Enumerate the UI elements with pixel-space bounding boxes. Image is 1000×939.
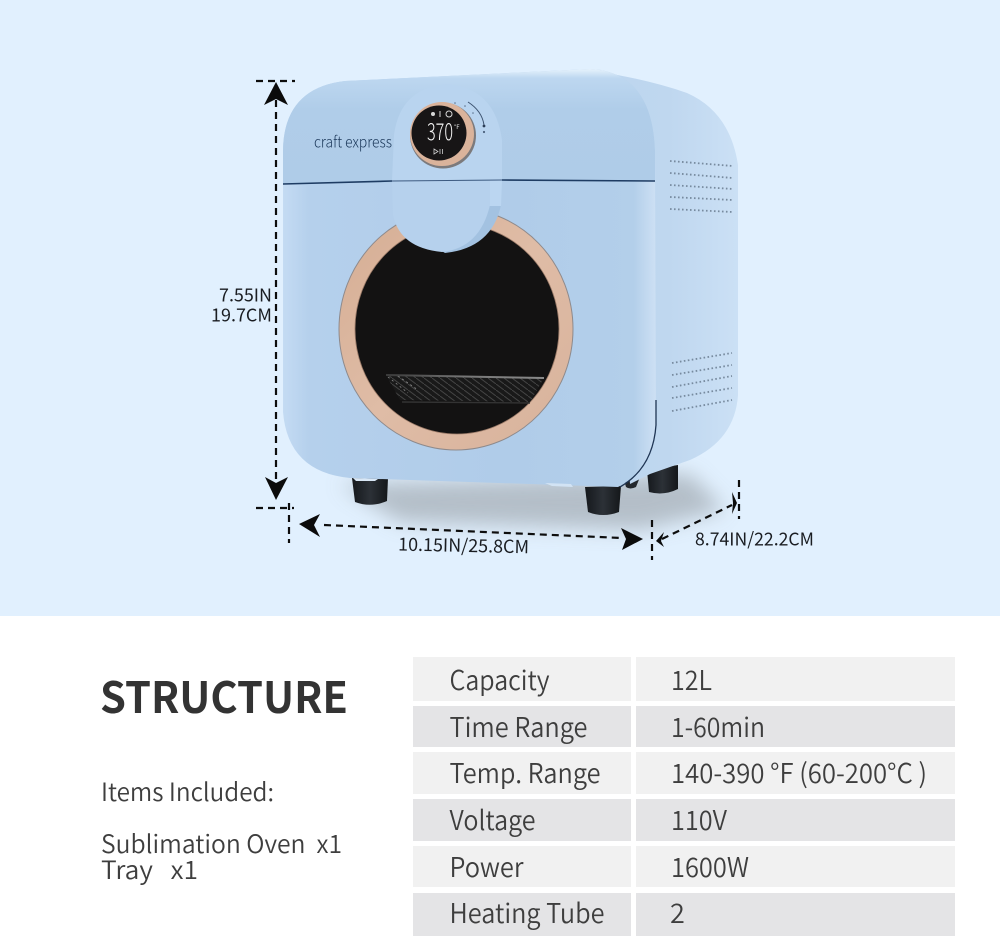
tray in window (386, 375, 544, 403)
floor shadow under oven (340, 474, 725, 530)
front and side seam (620, 400, 656, 487)
logo text: craft express (314, 130, 392, 152)
play pause icon (434, 149, 442, 154)
items included text block: Tray x1 (101, 851, 198, 887)
mode icons (431, 112, 435, 116)
control panel flap front (392, 181, 490, 252)
bottom bracket right (545, 483, 573, 487)
row: voltage (413, 799, 955, 841)
background: light blue product panel (0, 0, 1000, 616)
door window (355, 224, 559, 434)
depth label: 8.74IN/22.2CM (695, 526, 814, 552)
row: time range: Time Range (450, 706, 588, 745)
control knob (410, 102, 476, 168)
height label: 7.55IN (219, 282, 272, 308)
row: time range: 1-60min (671, 706, 765, 745)
width label: 10.15IN/25.8CM (398, 531, 529, 559)
row: voltage: 110V (671, 799, 728, 838)
row: voltage: Voltage (450, 799, 536, 838)
control panel side strip (489, 180, 502, 206)
control panel upper pill (392, 84, 502, 181)
row: capacity: 12L (671, 659, 712, 698)
side vents upper (670, 161, 733, 212)
height label: 19.7CM (211, 302, 272, 328)
small centre foot (624, 477, 640, 488)
row: heating tube: Heating Tube (450, 892, 604, 931)
panel seam (392, 180, 502, 181)
specification table (413, 657, 955, 936)
row: temperature range: 140-390 °F (60-200°C ) (671, 752, 927, 791)
background: white specification area (0, 616, 1000, 939)
row: capacity: Capacity (450, 659, 550, 698)
lid seam (283, 180, 655, 184)
left foot (352, 478, 388, 505)
dial arc (468, 102, 484, 125)
dimension: height (211, 81, 295, 508)
dimension: width (289, 503, 643, 559)
height label (211, 282, 272, 328)
control panel flap side (440, 205, 501, 253)
temperature readout: 370 (427, 113, 453, 147)
row: power: 1600W (671, 846, 749, 885)
row: capacity (413, 657, 955, 701)
control knob: °F (454, 122, 460, 131)
dimension: depth (652, 480, 814, 560)
rear foot (647, 465, 678, 493)
row: power (413, 846, 955, 887)
oven side wall (600, 72, 738, 484)
row: temperature range (413, 752, 955, 794)
row: power: Power (450, 846, 524, 885)
items included text block: Sublimation Oven x1 (101, 825, 342, 861)
right foot (585, 486, 621, 515)
side vents lower (672, 353, 732, 411)
oven front body (283, 69, 656, 487)
items included text block: Items Included: (101, 773, 274, 809)
row: heating tube: 2 (670, 892, 685, 931)
heading: structure: STRUCTURE (100, 664, 348, 726)
row: heating tube (413, 892, 955, 936)
row: time range (413, 706, 955, 747)
door ring (339, 208, 573, 450)
oven illustration (283, 69, 738, 515)
bottom bracket left (353, 478, 378, 481)
items included text block (101, 773, 342, 887)
oven top lid shading (283, 69, 655, 184)
row: temperature range: Temp. Range (450, 752, 600, 791)
